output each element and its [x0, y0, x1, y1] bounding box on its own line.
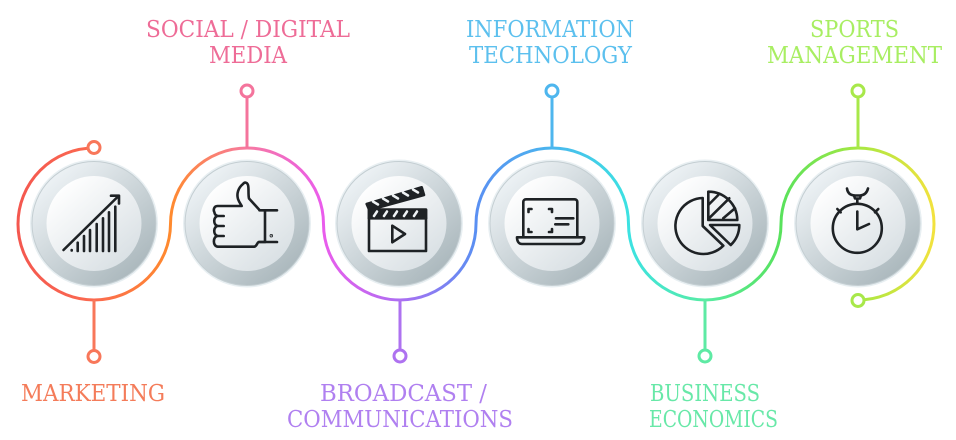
label: social / digital media: [146, 17, 350, 69]
label: sports management: SPORTS: [810, 17, 899, 43]
start dot and stem: marketing: [88, 142, 100, 362]
icon: rising bar chart with arrow: [64, 196, 119, 251]
icon: clapperboard with play button: [367, 187, 426, 251]
label: sports management: MANAGEMENT: [767, 43, 943, 69]
button: sports management: [794, 160, 922, 288]
icon: laptop: [517, 199, 584, 244]
label: business economics: BUSINESS: [650, 381, 760, 407]
icon: thumbs up: [214, 183, 277, 247]
label: information technology: [466, 17, 634, 69]
stem and dot: business economics: [699, 300, 711, 362]
button: business economics: [641, 160, 769, 288]
stem and dot: broadcast / communications: [394, 300, 406, 362]
button: information technology: [488, 160, 616, 288]
button: social / digital media: [183, 160, 311, 288]
label: social / digital media: SOCIAL / DIGITAL: [146, 17, 350, 43]
connector line: [18, 148, 934, 300]
icon: stopwatch: [833, 188, 882, 253]
stem and dots: sports management: [852, 85, 864, 306]
label: broadcast / communications: BROADCAST /: [320, 381, 487, 407]
label: information technology: INFORMATION: [466, 17, 634, 43]
label: broadcast / communications: [287, 381, 513, 433]
label: broadcast / communications: COMMUNICATIONS: [287, 407, 513, 433]
label: information technology: TECHNOLOGY: [469, 43, 633, 69]
label: marketing: MARKETING: [21, 381, 165, 407]
label: social / digital media: MEDIA: [209, 43, 287, 69]
label: business economics: [649, 381, 778, 433]
icon: pie chart: [675, 192, 739, 254]
label: business economics: ECONOMICS: [649, 407, 778, 433]
button: broadcast / communications: [335, 160, 463, 288]
label: sports management: [767, 17, 943, 69]
stem and dot: information technology: [546, 85, 558, 148]
stem and dot: social / digital media: [241, 85, 253, 148]
button: marketing: [30, 160, 158, 288]
